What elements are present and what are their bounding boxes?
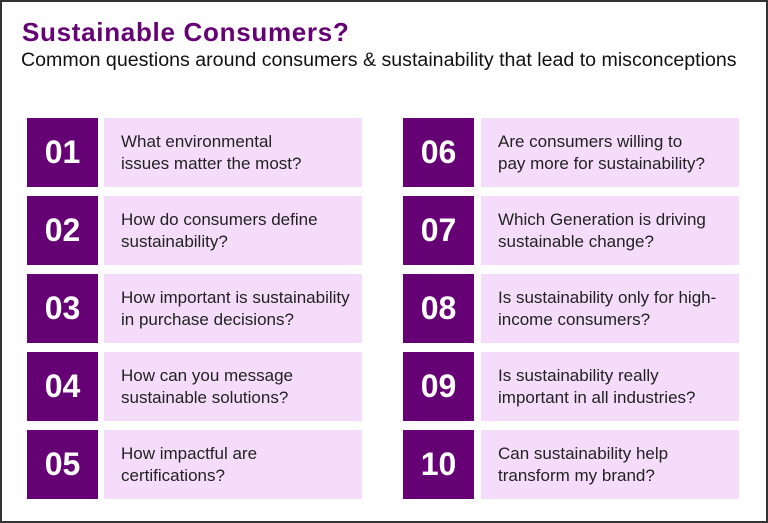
item 02 text: How do consumers define [121, 210, 318, 229]
item 07 text: Which Generation is driving [498, 210, 706, 229]
item 10 number [403, 430, 474, 499]
item 01 text: issues matter the most? [121, 154, 301, 173]
item 06 number: 06 [421, 134, 456, 170]
item 05 text: How impactful are [121, 444, 257, 463]
item 05 text [104, 430, 362, 499]
item 08 text [481, 274, 739, 343]
item 02 number [27, 196, 98, 265]
item 09 number [403, 352, 474, 421]
item 10 text: transform my brand? [498, 466, 655, 485]
item 05 number: 05 [45, 446, 80, 482]
item 06 text: pay more for sustainability? [498, 154, 705, 173]
item 02 number: 02 [45, 212, 80, 248]
item 01 number: 01 [45, 134, 80, 170]
item 02 text [104, 196, 362, 265]
item 10 number: 10 [421, 446, 456, 482]
subtitle: Common questions around consumers & sustainability that lead to misconceptions [21, 49, 737, 71]
item 09 text: important in all industries? [498, 388, 695, 407]
item 01 text: What environmental [121, 132, 272, 151]
item 06 number [403, 118, 474, 187]
item 07 number: 07 [421, 212, 456, 248]
item 03 text: in purchase decisions? [121, 310, 294, 329]
item 01 text [104, 118, 362, 187]
item 07 text [481, 196, 739, 265]
item 03 text: How important is sustainability [121, 288, 350, 307]
item 07 text: sustainable change? [498, 232, 654, 251]
item 06 text [481, 118, 739, 187]
item 07 number [403, 196, 474, 265]
item 04 text [104, 352, 362, 421]
item 02 text: sustainability? [121, 232, 228, 251]
item 08 number: 08 [421, 290, 456, 326]
item 03 number [27, 274, 98, 343]
item 08 number [403, 274, 474, 343]
item 09 text: Is sustainability really [498, 366, 659, 385]
item 01 number [27, 118, 98, 187]
item 03 number: 03 [45, 290, 80, 326]
title: Sustainable Consumers? [22, 17, 349, 47]
item 05 number [27, 430, 98, 499]
item 04 text: How can you message [121, 366, 293, 385]
item 04 number [27, 352, 98, 421]
item 06 text: Are consumers willing to [498, 132, 682, 151]
item 05 text: certifications? [121, 466, 225, 485]
item 04 number: 04 [45, 368, 80, 404]
item 08 text: income consumers? [498, 310, 650, 329]
item 04 text: sustainable solutions? [121, 388, 288, 407]
item 09 text [481, 352, 739, 421]
item 03 text [104, 274, 362, 343]
item 10 text: Can sustainability help [498, 444, 668, 463]
item 09 number: 09 [421, 368, 456, 404]
item 10 text [481, 430, 739, 499]
item 08 text: Is sustainability only for high- [498, 288, 716, 307]
